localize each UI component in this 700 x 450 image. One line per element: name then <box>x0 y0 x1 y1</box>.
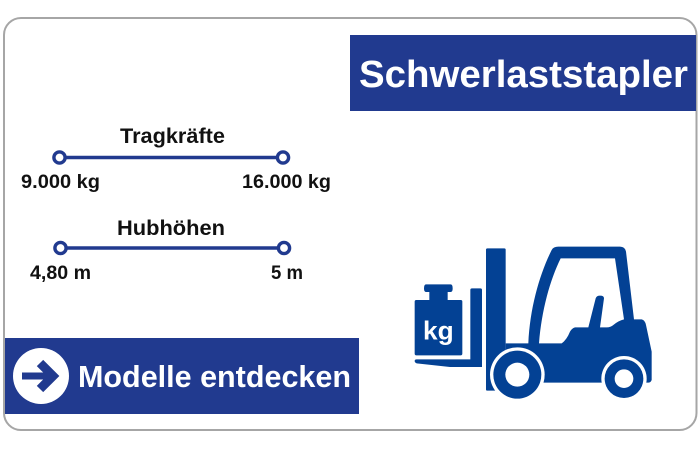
cab window <box>539 258 624 343</box>
title banner <box>350 35 696 111</box>
slider line: load capacity <box>54 152 289 163</box>
button: Modelle entdecken: Modelle entdecken <box>78 359 351 394</box>
heading: Hubhöhen: Hubhöhen <box>117 216 225 240</box>
carriage and fork <box>415 288 482 367</box>
heading: Tragkräfte: Tragkräfte <box>120 124 225 148</box>
label: minimum height: 4,80 m <box>30 263 91 284</box>
weight: kg <box>423 315 454 345</box>
forklift body <box>506 247 652 383</box>
mast <box>486 248 506 391</box>
label: maximum load: 16.000 kg <box>242 172 331 193</box>
slider line: lift height <box>55 242 290 254</box>
label: maximum height: 5 m <box>271 263 303 284</box>
label: minimum load: 9.000 kg <box>21 172 100 193</box>
title banner: Schwerlaststapler <box>359 54 688 96</box>
range: Hubhöhen <box>30 216 303 284</box>
button: Modelle entdecken <box>5 338 359 414</box>
icon: forklift with kg weight <box>415 247 652 402</box>
front wheel <box>601 356 647 401</box>
weight <box>415 284 462 355</box>
icon: arrow in circle <box>13 348 69 404</box>
range: Tragkräfte <box>21 124 331 193</box>
rear wheel <box>490 347 545 402</box>
